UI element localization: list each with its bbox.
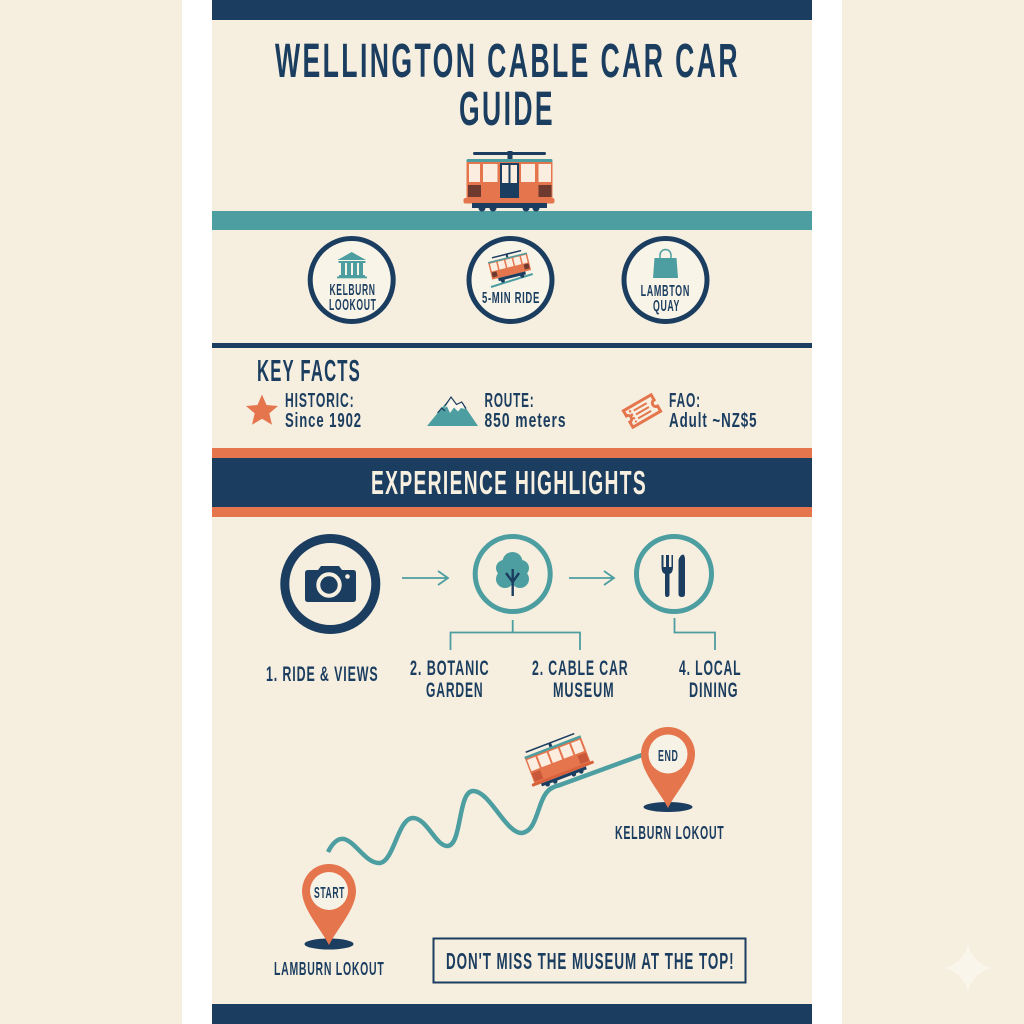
navy divider — [212, 343, 812, 348]
banner: experience highlights — [212, 448, 812, 517]
fact: route: ROUTE: — [484, 390, 534, 412]
pin: start — [302, 864, 356, 950]
badge: 5-min ride — [469, 238, 552, 322]
label: botanic garden: GARDEN — [426, 679, 484, 702]
heading: key facts: KEY FACTS — [257, 353, 361, 388]
banner: experience highlights: EXPERIENCE HIGHLIGHTS — [371, 464, 647, 501]
icon: camera ring — [285, 538, 376, 630]
pin: end: END — [658, 748, 678, 765]
title — [275, 35, 740, 136]
label: Lamburn lookout: LAMBURN LOKOUT — [274, 958, 384, 979]
top bar — [212, 0, 812, 20]
badge: Kelburn Lookout: LOOKOUT — [329, 297, 376, 314]
icon: museum building — [337, 252, 367, 278]
fact: historic: Since 1902 — [285, 410, 362, 432]
fact: fare: FAO: — [669, 390, 701, 412]
connector: garden and museum — [450, 620, 580, 650]
badge: Kelburn Lookout — [310, 238, 393, 322]
badge: Lambton Quay: LAMBTON — [641, 283, 690, 300]
fact: fare — [623, 390, 758, 432]
arrow — [402, 571, 448, 585]
label: cable car museum: MUSEUM — [553, 679, 614, 702]
icon: shopping bag — [653, 250, 678, 278]
label: local dining: 4. LOCAL — [679, 657, 742, 680]
pin: end — [641, 727, 695, 812]
label: local dining — [679, 657, 742, 702]
badge: Lambton Quay — [624, 238, 707, 322]
bottom bar — [212, 1004, 812, 1024]
icon: sparkle — [945, 945, 991, 991]
label: ride and views: 1. RIDE & VIEWS — [266, 663, 378, 686]
label: botanic garden — [410, 657, 490, 702]
label: botanic garden: 2. BOTANIC — [410, 657, 490, 680]
icon: dining ring — [636, 536, 712, 612]
badge: Kelburn Lookout: KELBURN — [330, 282, 376, 299]
connector: dining — [674, 618, 715, 650]
icon: star — [246, 394, 278, 425]
icon: cable car on route — [520, 730, 596, 792]
fact: route — [427, 390, 566, 432]
badge: Lambton Quay: QUAY — [653, 298, 680, 315]
label: cable car museum — [532, 657, 628, 702]
title: GUIDE — [459, 83, 555, 136]
fact: historic — [246, 390, 362, 432]
route line — [328, 755, 642, 863]
label: local dining: DINING — [689, 679, 738, 702]
icon: mountain — [427, 397, 478, 426]
icon: cable car — [464, 151, 554, 212]
label: Kelburn lookout: KELBURN LOKOUT — [615, 822, 724, 843]
fact: fare: Adult ~NZ$5 — [669, 410, 758, 432]
fact: route: 850 meters — [484, 410, 566, 432]
badge: 5-min ride: 5-MIN RIDE — [482, 290, 540, 307]
label: cable car museum: 2. CABLE CAR — [532, 657, 628, 680]
pin: start: START — [314, 885, 345, 902]
icon: ticket — [623, 395, 661, 427]
callout: DON'T MISS THE MUSEUM AT THE TOP! — [446, 948, 734, 974]
icon: tilted cable car — [487, 249, 533, 287]
icon: tree ring — [475, 536, 550, 612]
teal track band — [212, 211, 812, 230]
fact: historic: HISTORIC: — [285, 390, 354, 412]
arrow — [569, 571, 614, 585]
callout — [434, 938, 746, 982]
